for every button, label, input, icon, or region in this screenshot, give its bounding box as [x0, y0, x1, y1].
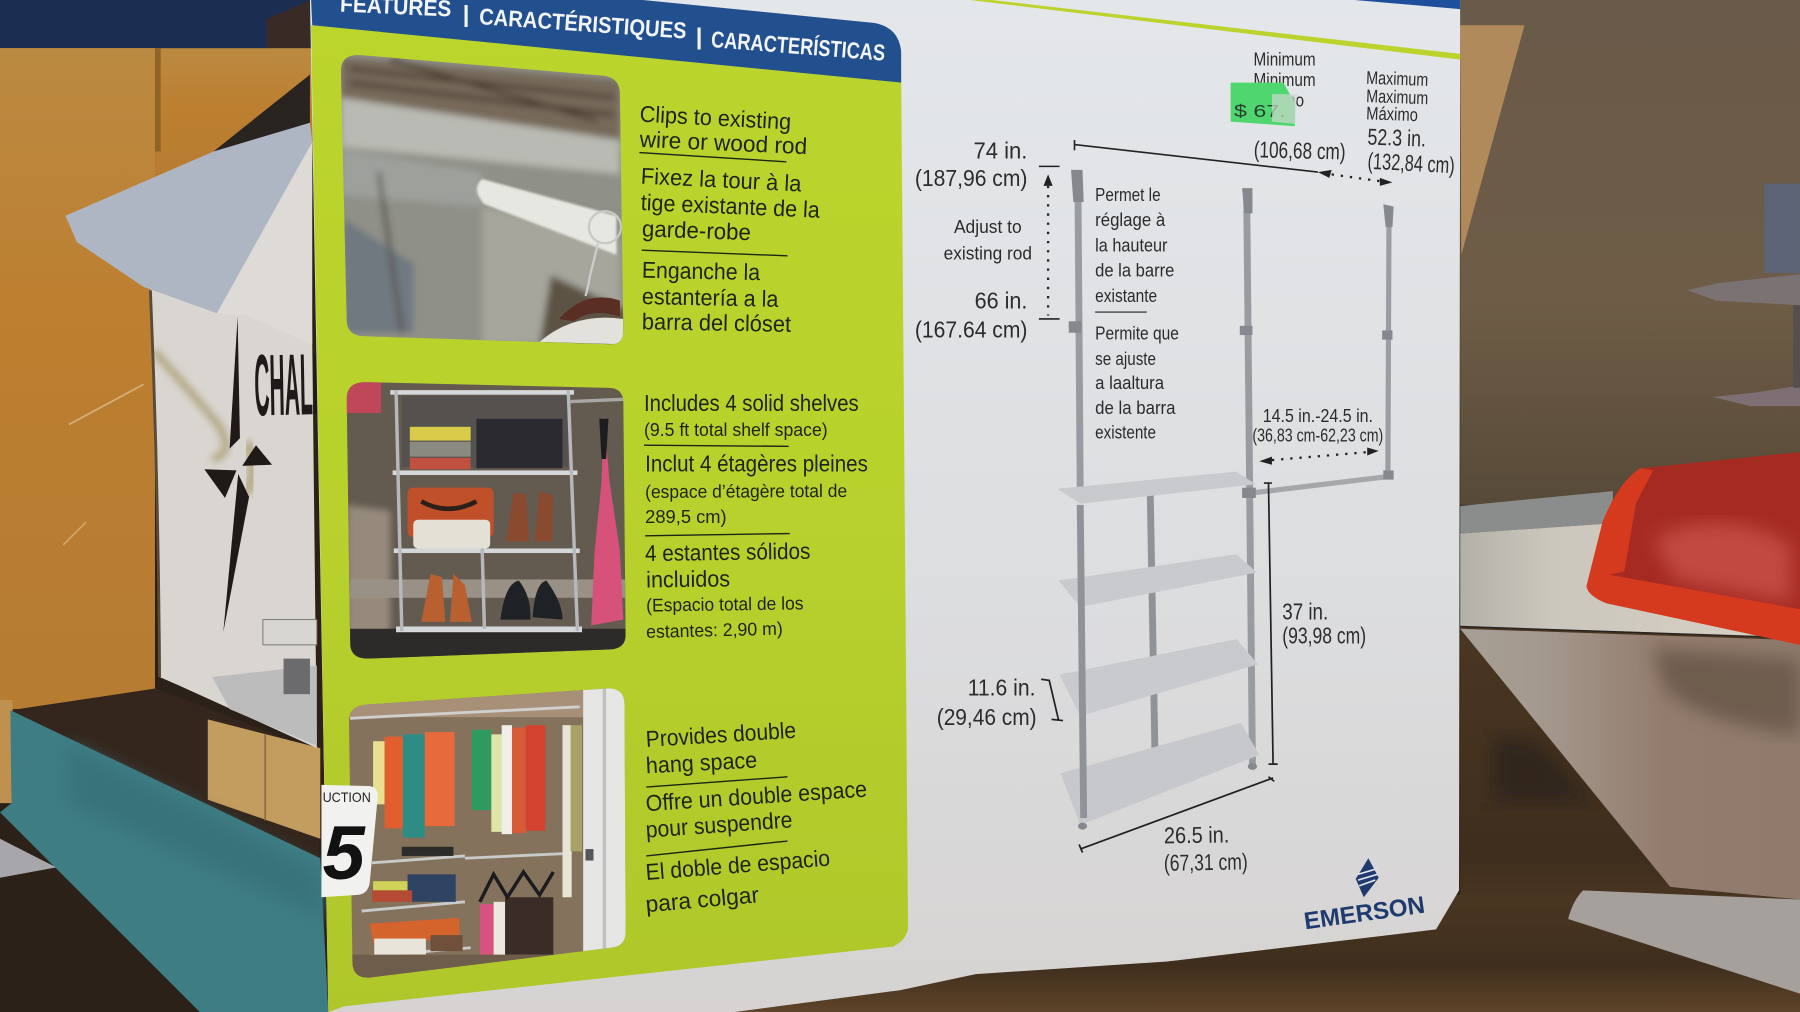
arrow: rod extension [1259, 447, 1379, 465]
label: minimum width: Minimum [1254, 48, 1316, 69]
icon: carton star logo [204, 317, 272, 632]
label: adjust to existing rod: existing rod [944, 242, 1032, 263]
brand name: emerson: EMERSON [1302, 892, 1427, 935]
text block: solid shelves: estantes: 2,90 m) [646, 618, 783, 642]
price sticker [1231, 83, 1297, 126]
text block: double hang: pour suspendre [645, 806, 793, 843]
text block: spanish adjustment note: se ajuste [1095, 348, 1156, 369]
diagram: closet tower [1057, 170, 1394, 830]
text block: spanish adjustment note: Permite que [1095, 323, 1179, 344]
text block: solid shelves [644, 390, 868, 642]
top lime stripe [970, 0, 1460, 60]
arrow: width adjustment [1318, 170, 1392, 186]
text block: solid shelves: (Espacio total de los [646, 592, 804, 616]
heading band: features: CARACTÉRISTIQUES [478, 3, 687, 44]
text block: french adjustment note: réglage à [1095, 209, 1166, 230]
text block: spanish adjustment note [1095, 323, 1179, 442]
label: tower width: (67,31 cm) [1164, 848, 1248, 876]
label: adjust to existing rod [944, 216, 1032, 263]
label: rod extension range: (36,83 cm-62,23 cm) [1252, 425, 1383, 446]
dimension: rod height [1264, 483, 1278, 764]
icon: emerson logo [1356, 858, 1379, 897]
text block: solid shelves: 4 estantes sólidos [645, 538, 811, 566]
text block: clips to rod: Fixez la tour à la [640, 163, 802, 196]
price sticker: $ 67. [1234, 101, 1286, 121]
label: tower width [1164, 821, 1248, 876]
text block: solid shelves: 289,5 cm) [645, 506, 727, 527]
label: adjust to existing rod: Adjust to [954, 216, 1022, 237]
sticker: auction lot number: 5 [323, 811, 366, 896]
text block: double hang: Provides double [645, 717, 797, 752]
label: top height: (187,96 cm) [915, 165, 1027, 191]
label: low height: (167.64 cm) [915, 316, 1027, 342]
text block: double hang: Offre un double espace [645, 776, 868, 816]
label: rod height: (93,98 cm) [1282, 623, 1366, 649]
text block: solid shelves: incluidos [646, 565, 730, 592]
label: maximum width: 52.3 in. [1367, 124, 1426, 152]
photo: shelves with folded clothes and shoes [339, 379, 631, 665]
heading band: features: | [463, 1, 470, 27]
text block: spanish adjustment note: de la barra [1095, 397, 1176, 418]
heading band: features: | [696, 24, 703, 50]
arrow: height adjustment [1039, 166, 1060, 319]
dimension: tower width [1079, 777, 1274, 853]
label: top height: 74 in. [973, 137, 1027, 163]
label: minimum width: (106,68 cm) [1253, 136, 1346, 165]
panel: features lime background [311, 25, 908, 1012]
label: minimum width: Mínimo [1254, 90, 1304, 111]
label: rod height [1282, 599, 1366, 649]
label: maximum width [1366, 67, 1455, 178]
text block: solid shelves: (espace d’étagère total de [645, 480, 847, 502]
text block: spanish adjustment note: existente [1095, 421, 1156, 442]
text block: clips to rod: barra del clóset [642, 308, 792, 337]
label: minimum width: Minimum [1254, 69, 1316, 90]
text block: french adjustment note [1095, 184, 1174, 312]
cardboard sheet [0, 48, 312, 709]
text block: clips to rod: estantería a la [642, 283, 779, 312]
right side: white shelf unit [1460, 491, 1800, 994]
text block: double hang: hang space [645, 747, 758, 778]
torn white carton [65, 75, 317, 748]
label: maximum width: Máximo [1366, 102, 1418, 125]
label: shelf depth: (29,46 cm) [937, 704, 1037, 730]
navy fabric, top left [0, 0, 312, 69]
label: rod extension range: 14.5 in.-24.5 in. [1263, 405, 1373, 426]
text block: clips to rod [638, 101, 821, 337]
label: tower width: 26.5 in. [1164, 821, 1230, 848]
top right blue band [1355, 0, 1460, 9]
dimension: shelf depth [1041, 679, 1063, 721]
label: low height: 66 in. [975, 288, 1027, 314]
metal stand, top right [1688, 184, 1800, 406]
teal shelf beam [0, 688, 328, 1012]
red cloth bag [1586, 452, 1800, 645]
text block: solid shelves: Inclut 4 étagères pleines [645, 451, 868, 477]
label: low height [915, 288, 1027, 342]
product box front face [310, 0, 1460, 1012]
label: minimum width [1253, 48, 1346, 165]
label: top height [915, 137, 1027, 191]
text block: clips to rod: garde-robe [642, 215, 751, 245]
text block: double hang: El doble de espacio [645, 845, 831, 885]
label: maximum width: Maximum [1366, 85, 1429, 108]
heading band: features: CARACTERÍSTICAS [710, 26, 886, 66]
text block: french adjustment note: de la barre [1095, 260, 1174, 281]
label: maximum width: (132,84 cm) [1367, 148, 1455, 178]
text block: double hang: para colgar [644, 881, 760, 917]
heading band: features [311, 0, 901, 83]
carton shipping label [263, 620, 317, 694]
label: shelf depth [937, 674, 1037, 730]
label: rod height: 37 in. [1282, 599, 1328, 625]
photo: clip on rod [333, 46, 631, 350]
text block: french adjustment note: existante [1095, 285, 1157, 306]
text block: clips to rod: Clips to existing [639, 101, 792, 135]
text block: spanish adjustment note: a laaltura [1095, 372, 1165, 393]
text block: french adjustment note: Permet le [1095, 184, 1161, 205]
text block: double hang [644, 717, 868, 917]
label: shelf depth: 11.6 in. [968, 674, 1035, 700]
label: rod extension range [1252, 405, 1383, 446]
label: maximum width: Maximum [1366, 67, 1429, 90]
text block: clips to rod: wire or wood rod [638, 126, 808, 159]
photo: double hanging clothes [349, 688, 626, 978]
sticker: auction lot number [321, 785, 378, 897]
text block: solid shelves: (9.5 ft total shelf space) [644, 419, 828, 440]
text block: clips to rod: tige existante de la [640, 189, 821, 223]
photo of product box on shelf: CHALL [253, 336, 326, 434]
text block: solid shelves: Includes 4 solid shelves [644, 390, 859, 416]
text block: clips to rod: Enganche la [642, 257, 761, 285]
sticker: auction lot number: UCTION [323, 790, 371, 805]
text block: french adjustment note: la hauteur [1095, 234, 1167, 255]
dimension: overall width line [1074, 140, 1318, 172]
